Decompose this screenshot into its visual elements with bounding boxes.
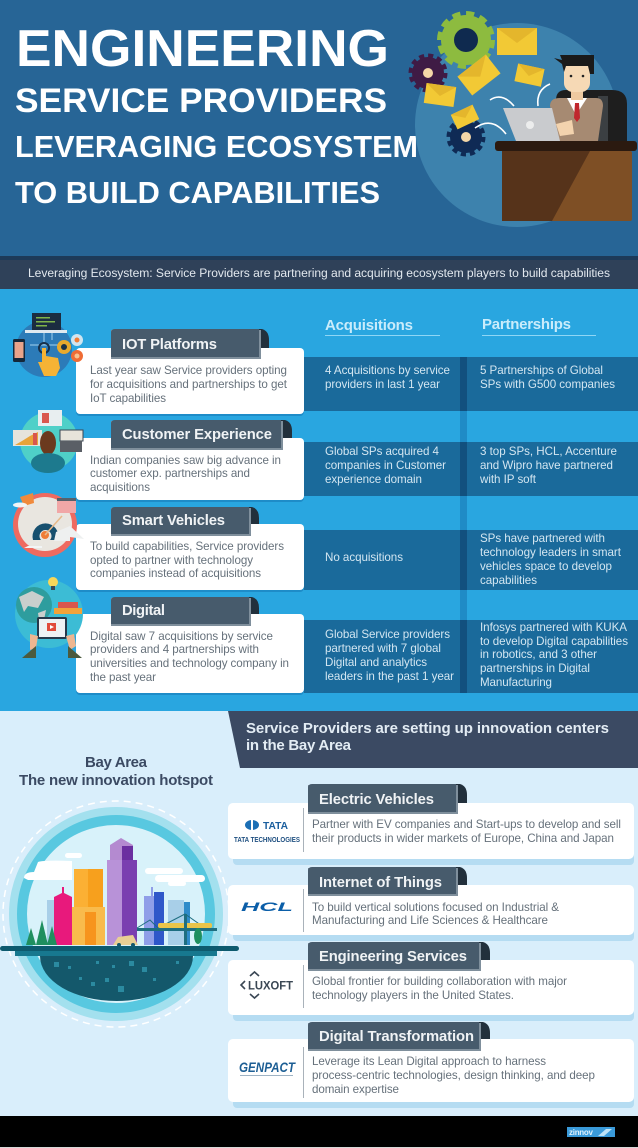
card: digital: providers and 4 partnerships with: [90, 643, 259, 656]
logo: HCL: HCL: [241, 900, 293, 914]
card: customer experience: [76, 420, 304, 502]
logo: Luxoft: LUXOFT: [248, 978, 294, 992]
card: customer experience: customer exp. partnerships and: [90, 467, 250, 480]
row: digital: [304, 620, 638, 693]
card: digital transformation, Genpact: Leverage its Lean Digital approach to harness: [312, 1055, 546, 1068]
banner: innovation centers: [228, 711, 638, 768]
heading: acquisitions: [325, 317, 440, 336]
row: IOT platforms: 4 Acquisitions by service: [325, 364, 450, 377]
row: digital: to develop Digital capabilities: [480, 635, 628, 648]
icon: smart vehicles speedometer: [13, 493, 84, 557]
heading: partnerships: [482, 316, 596, 336]
illustration: man at desk with gears and envelopes: [411, 14, 637, 227]
row: IOT platforms: SPs with G500 companies: [480, 378, 615, 391]
panel: bay area: [0, 711, 638, 1116]
card: customer experience: acquisitions: [90, 481, 150, 494]
row: IOT platforms: 5 Partnerships of Global: [480, 364, 603, 377]
icon: customer experience person: [13, 410, 83, 473]
row: customer experience: companies in Customer: [325, 459, 446, 472]
subtitle band: [0, 256, 638, 289]
row: digital: partnerships in Digital: [480, 662, 590, 675]
title: ENGINEERING: [16, 20, 389, 78]
row: customer experience: 3 top SPs, HCL, Accenture: [480, 445, 617, 458]
row: digital: Manufacturing: [480, 676, 552, 689]
card: engineering services, Luxoft: Global frontier for building collaboration with major: [312, 975, 567, 988]
row: smart vehicles: [304, 530, 638, 590]
row: digital: Global Service providers: [325, 628, 450, 641]
row: digital: in robotics, and 3 other: [480, 648, 597, 661]
logo: zinnov: [567, 1127, 615, 1137]
row: smart vehicles: SPs have partnered with: [480, 532, 605, 545]
title: [15, 20, 418, 210]
card: internet of things, HCL: Manufacturing and Life Sciences & Healthcare: [312, 914, 548, 927]
heading: bay area hotspot: [19, 754, 213, 789]
card: digital: the past year: [90, 671, 156, 684]
illustration: city skyline in circle: [0, 801, 239, 1027]
card: engineering services, Luxoft: Engineering Services: [319, 949, 467, 965]
heading: bay area hotspot: Bay Area: [85, 754, 148, 771]
logo: Genpact: GENPACT: [239, 1059, 296, 1075]
logo: Tata: TATA: [263, 821, 288, 832]
card: digital transformation, Genpact: domain expertise: [312, 1083, 399, 1096]
column divider: [460, 357, 467, 693]
row: digital: leaders in the past 1 year: [325, 670, 454, 683]
row: smart vehicles: technology leaders in smart: [480, 546, 622, 559]
card: digital transformation, Genpact: process-centric technologies, design thinking, and deep: [312, 1069, 595, 1082]
card: smart vehicles: Smart Vehicles: [122, 513, 225, 529]
icon: IOT hand and devices: [13, 313, 83, 377]
heading: partnerships: Partnerships: [482, 316, 571, 333]
card: customer experience: Customer Experience: [122, 427, 272, 443]
header panel: [0, 0, 638, 257]
card: electric vehicles, Tata: their products in wider markets of Europe, China and Japan: [312, 832, 614, 845]
card: smart vehicles: companies instead of acquisitions: [90, 567, 261, 580]
heading: bay area hotspot: The new innovation hotspot: [19, 772, 213, 789]
banner: innovation centers: Service Providers are setting up innovation centers: [246, 720, 609, 737]
card: IOT platforms: for acquisitions and partnerships to get: [90, 378, 288, 391]
banner: innovation centers: in the Bay Area: [246, 737, 352, 754]
card: IOT platforms: [76, 329, 304, 416]
title: LEVERAGING ECOSYSTEM: [15, 129, 418, 164]
card: smart vehicles: [76, 507, 304, 592]
logo: zinnov: zinnov: [569, 1128, 594, 1137]
card: digital: universities and technology company in: [90, 657, 289, 670]
card: customer experience: Indian companies saw big advance in: [90, 454, 281, 467]
row: digital: Digital and analytics: [325, 656, 427, 669]
card: internet of things, HCL: [228, 867, 634, 941]
row: IOT platforms: [304, 357, 638, 411]
card: internet of things, HCL: To build vertical solutions focused on Industrial &: [312, 901, 559, 914]
card: IOT platforms: IoT capabilities: [90, 392, 166, 405]
heading: acquisitions: Acquisitions: [325, 317, 413, 334]
row: smart vehicles: vehicles space to develop: [480, 560, 612, 573]
card: IOT platforms: IOT Platforms: [122, 337, 217, 353]
logo: Luxoft: [241, 972, 294, 998]
card: internet of things, HCL: Internet of Things: [319, 875, 442, 891]
card: engineering services, Luxoft: [228, 942, 634, 1021]
row: customer experience: Global SPs acquired 4: [325, 445, 440, 458]
row: digital: partnered with 7 global: [325, 642, 441, 655]
row: IOT platforms: providers in last 1 year: [325, 378, 440, 391]
card: IOT platforms: Last year saw Service providers opting: [90, 364, 287, 377]
card: engineering services, Luxoft: technology players in the United States.: [312, 989, 514, 1002]
row: customer experience: [304, 442, 638, 496]
row: smart vehicles: capabilities: [480, 574, 537, 587]
logo: Tata: [234, 820, 300, 844]
icon: digital globe and tablet: [15, 577, 83, 658]
row: customer experience: with IP soft: [479, 473, 537, 486]
row: customer experience: experience domain: [325, 473, 422, 486]
card: electric vehicles, Tata: Partner with EV companies and Start-ups to develop and sell: [312, 818, 621, 831]
card: digital transformation, Genpact: [228, 1022, 634, 1108]
card: smart vehicles: To build capabilities, Service providers: [90, 540, 284, 553]
row: smart vehicles: No acquisitions: [325, 551, 403, 564]
card: electric vehicles, Tata: [228, 784, 634, 865]
card: digital: Digital saw 7 acquisitions by service: [90, 630, 273, 643]
logo: Tata: TATA TECHNOLOGIES: [234, 837, 300, 844]
card: digital transformation, Genpact: Digital Transformation: [319, 1029, 474, 1045]
card: digital: Digital: [122, 603, 165, 619]
row: digital: Infosys partnered with KUKA: [480, 621, 627, 634]
title: TO BUILD CAPABILITIES: [15, 175, 380, 210]
footer bar: [0, 1116, 638, 1148]
card: smart vehicles: opted to partner with technology: [90, 554, 253, 567]
title: SERVICE PROVIDERS: [15, 82, 387, 120]
card: electric vehicles, Tata: Electric Vehicles: [319, 792, 434, 808]
card: digital: [76, 597, 304, 695]
subtitle band: Leveraging Ecosystem: Service Providers are partnering and acquiring ecosystem players to build capabilities: [28, 266, 610, 280]
panel: ecosystem table: [0, 289, 638, 711]
row: customer experience: and Wipro have partnered: [480, 459, 613, 472]
